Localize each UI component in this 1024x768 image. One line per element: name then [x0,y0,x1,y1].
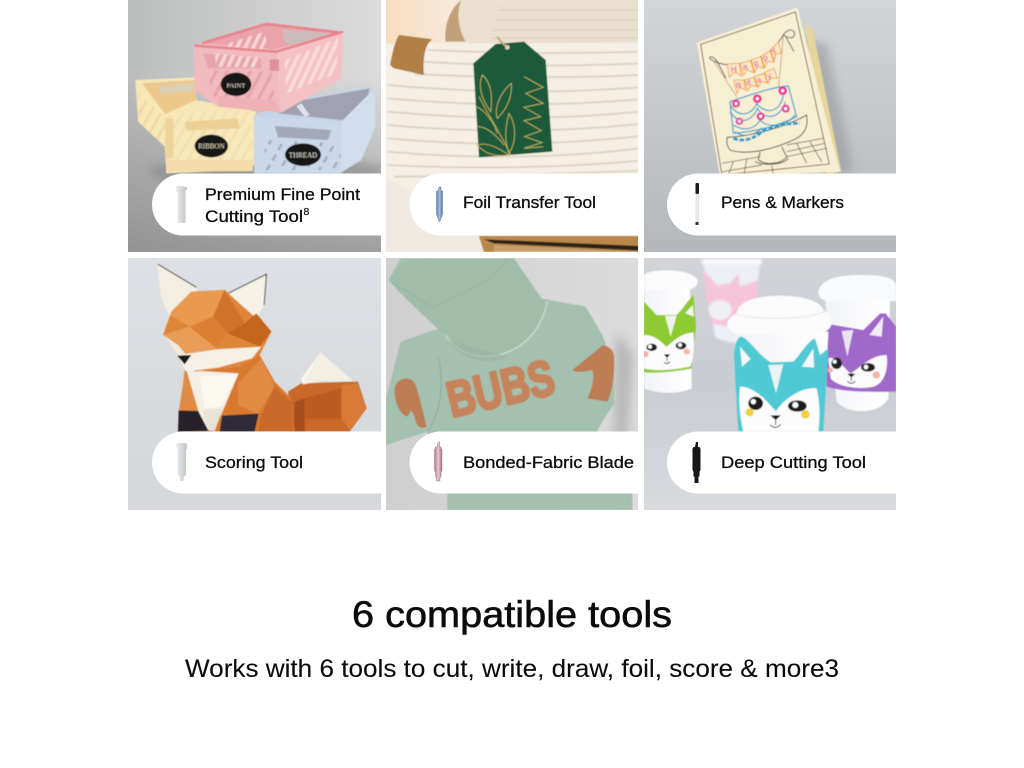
title: 6 compatible tools [352,594,672,635]
photo: hand-drawn birthday card: a [741,61,749,72]
photo: stacked storage crates [128,0,388,252]
crate: blue [254,86,375,173]
photo: hand-drawn birthday card: a [756,75,763,85]
panel: Deep Cutting Tool [640,258,927,510]
cake stand [727,115,807,164]
floor tiles [722,138,827,175]
photo: hand-drawn birthday card: B [736,81,741,90]
pill label [667,174,896,236]
crate: blue: THREAD [289,152,317,160]
crate: yellow: RIBBON [198,142,225,150]
label text: Deep Cutting Tool [721,453,866,472]
photo: fox mugs with felt sleeves [640,258,896,510]
photo: low-poly paper fox [128,258,381,510]
photo: woven basket with foil gift tag [384,0,640,252]
label text: Premium Fine Point [205,185,360,204]
teal cup [727,296,832,432]
fox body [178,355,295,432]
wooden surface [479,236,640,252]
crate: pink [193,23,343,113]
panel: Premium Fine Point Cutting Tool [128,0,381,252]
pink cup [702,259,762,342]
icon: deep cutting tool [692,442,700,483]
icon: bonded-fabric blade [434,442,442,481]
icon: fine point cutting tool [176,186,187,223]
green tag [473,37,552,157]
hoodie [386,258,632,510]
pill label [667,432,927,494]
crate: yellow [135,77,256,173]
basket [386,43,640,190]
icon: scoring tool [176,443,187,481]
leather handle [390,35,432,75]
BUBS letters: BUBS [442,349,560,428]
photo: hand-drawn birthday card [640,0,896,252]
flowers [732,86,790,125]
label text: Cutting Tool [205,207,303,226]
cake [730,86,797,136]
label text: Pens & Markers [721,193,844,212]
subtitle: Works with 6 tools to cut, write, draw, foil, score & more3 [185,655,839,683]
pill label [410,432,670,494]
photo: hand-drawn birthday card: H [730,64,737,74]
pill label [410,174,638,236]
green cup [643,270,698,393]
fox head [163,290,271,372]
label text: 8 [304,206,310,218]
blanket [445,0,640,43]
purple cup [818,275,896,411]
icon: foil transfer tool [436,187,442,222]
fox ears [157,264,266,319]
crate: pink: PAINT [226,82,245,89]
photo: hand-drawn birthday card: p [761,52,770,63]
label text: Foil Transfer Tool [463,193,596,212]
sleeve patches [394,346,614,428]
fox tail [288,352,367,432]
label text: Bonded-Fabric Blade [463,453,634,472]
panel: Bonded-Fabric Blade [386,258,638,510]
photo: hand-drawn birthday card: y [766,71,772,81]
panel: Scoring Tool [128,258,381,510]
panel: Pens & Markers [644,0,896,252]
photo: hand-drawn birthday card: y [769,44,778,55]
label text [205,185,360,226]
photo: hand-drawn birthday card: d [745,78,751,87]
photo: hand-drawn birthday card: p [752,57,760,68]
label text: Scoring Tool [205,453,303,472]
photo: green hoodie with iron-on letters [384,258,640,510]
icon: pen [696,183,699,225]
panel: Foil Transfer Tool [386,0,638,252]
banner [710,30,795,97]
infographic canvas [128,0,896,680]
pill label [152,432,381,494]
pill label [152,174,381,236]
